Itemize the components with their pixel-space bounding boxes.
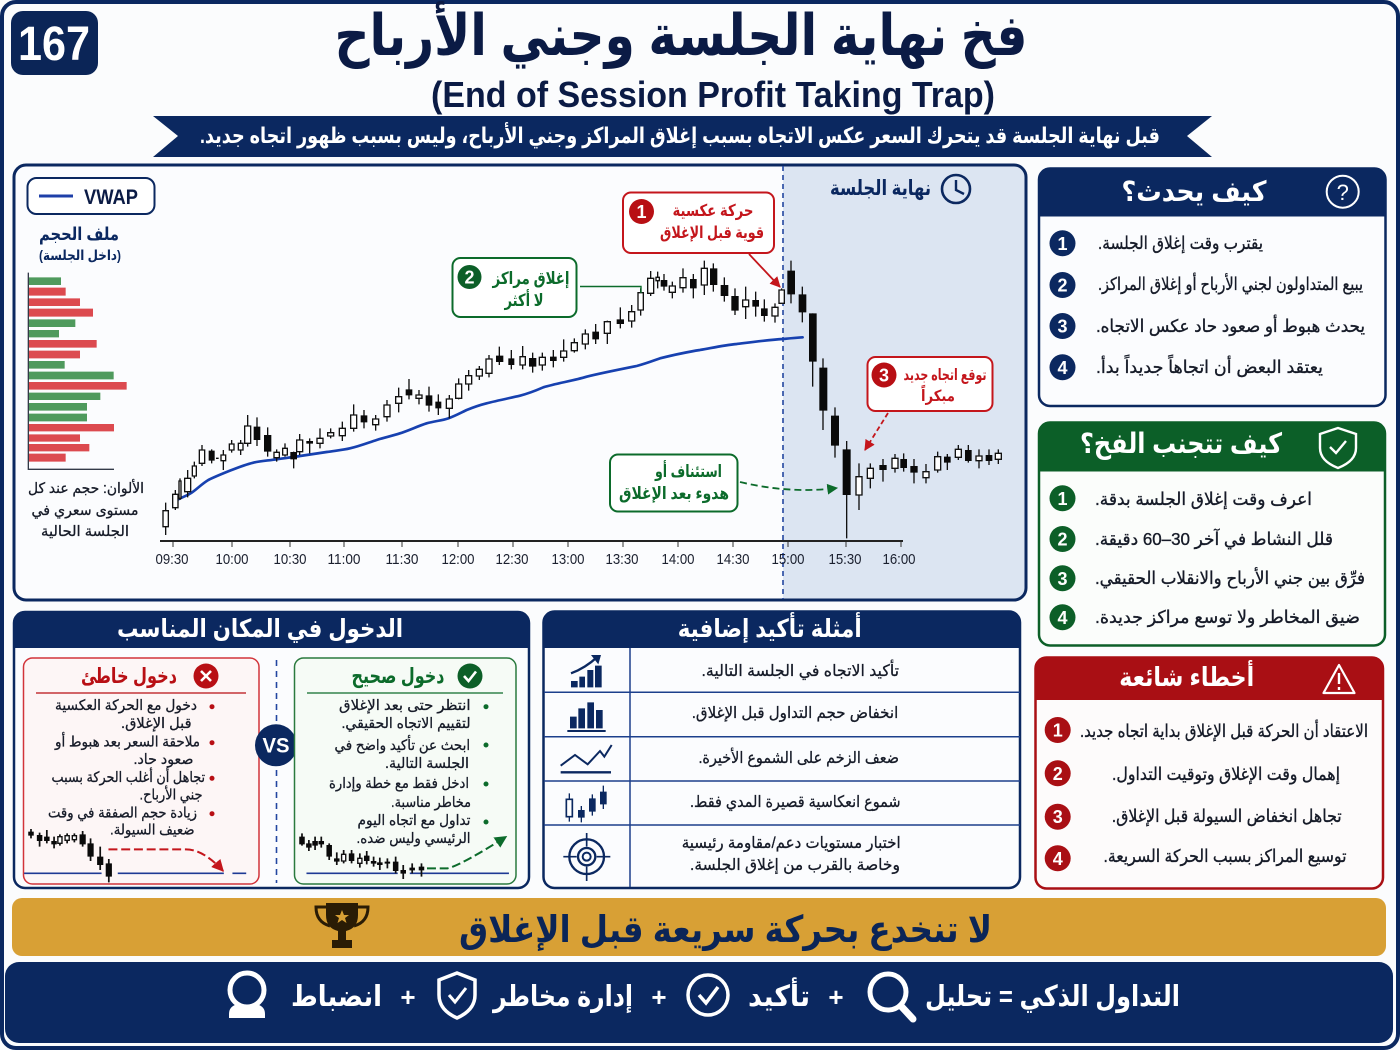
banner: smart trading formula: التداول الذكي = تحليل [925,981,1180,1013]
box: correct entry: ادخل فقط مع خطة وإدارة [329,776,469,792]
list: how it happens steps: 2 [1057,276,1068,296]
box: wrong entry: جني الأرباح. [140,786,202,804]
list: mistakes [1045,717,1368,871]
callout 2: closing positions: إغلاق مراكز [492,269,570,289]
box: correct entry: دخول صحيح [352,665,445,688]
list: avoidance steps: قلل النشاط في آخر 30–60 دقيقة. [1095,528,1333,550]
axis: time axis: 11:30 [386,551,418,568]
callout 2: closing positions [452,258,576,317]
table: confirmation rows text: شموع انعكاسية قصيرة المدي فقط. [690,794,901,812]
divider and VS badge: VS [262,734,290,758]
heading: how does it happen: كيف يحدث؟ [1122,176,1267,207]
banner: gold warning [12,898,1386,956]
box: correct entry: الجلسة التالية. [385,756,469,772]
text: colour note [28,479,144,540]
box: correct entry: الرئيسي وليس ضده. [356,831,470,847]
axis: time axis: 10:30 [274,551,306,568]
callout 4: calm after close [610,454,738,512]
list: avoidance steps: 2 [1057,530,1068,550]
badge: number 167: 167 [18,18,90,71]
ribbon: summary sentence: قبل نهاية الجلسة قد يتحرك السعر عكس الاتجاه بسبب إغلاق المراكز وجني الأرباح، وليس بسبب ظهور اتجاه جديد. [200,121,1160,149]
callout 4: calm after close: هدوء بعد الإغلاق [619,484,729,504]
list: how it happens steps: 4 [1057,358,1068,378]
banner: smart trading formula: إدارة مخاطر [491,981,633,1014]
heading: common mistakes: أخطاء شائعة [1119,660,1254,692]
callout 2: closing positions: 2 [464,268,475,288]
box: wrong entry: قبل الإغلاق. [121,716,192,732]
list: how it happens steps: يحدث هبوط أو صعود حاد عكس الاتجاه. [1096,314,1365,337]
list: mistakes: 4 [1053,849,1063,869]
box: correct entry: انتظر حتى بعد الإغلاق [339,698,471,714]
arrow: callout 1 to reversal [749,254,780,287]
table: confirmation rows text [682,659,901,875]
icon: magnifier [870,974,913,1019]
connector: callout 2 to peak [580,286,641,293]
axis: time axis: 14:30 [716,551,750,568]
text: colour note: الألوان: حجم عند كل [28,479,144,497]
axis: time axis: 13:30 [606,551,638,568]
axis: time axis [156,541,916,568]
list: avoidance steps [1050,485,1365,630]
banner: smart trading formula: + [400,982,416,1012]
axis: time axis: 09:30 [156,551,188,568]
callout 1: strong reversal: حركة عكسية [672,202,754,221]
callout 3: early new trend expectation: مبكراً [921,385,955,405]
list: mistakes: إهمال وقت الإغلاق وتوقيت التداول. [1112,764,1340,785]
list: avoidance steps: فرِّق بين جني الأرباح والانقلاب الحقيقي. [1095,567,1365,589]
list: mistakes: 3 [1053,807,1063,827]
chart: candlesticks afternoon and close [520,261,1001,538]
icons: confirmation rows [561,655,612,881]
axis: time axis: 15:00 [772,551,804,568]
icon: question mark: ? [1337,180,1349,205]
callout 4: calm after close: استئناف أو [654,460,722,482]
banner: smart trading formula: + [651,982,667,1012]
line: VWAP [178,337,803,499]
box: wrong entry: تجاهل أن أغلب الحركة بسبب [52,767,205,786]
arrow: callout 4 to candles [740,482,837,490]
panel: how to avoid the trap [1039,422,1385,646]
divider and VS badge [255,660,297,883]
heading: volume profile: (داخل الجلسة) [39,247,121,263]
box: correct entry [294,658,516,884]
panel: price chart [14,165,1026,600]
box: correct entry: تداول مع اتجاه اليوم [358,813,470,829]
legend: VWAP: VWAP [84,186,138,209]
axis: time axis: 13:00 [552,551,584,568]
heading: how to avoid the trap: كيف تتجنب الفخ؟ [1080,428,1283,460]
panel: additional confirmation examples [544,612,1020,888]
icon: check circle [688,975,728,1015]
icon: person [229,973,265,1018]
list: mistakes: 1 [1053,720,1063,740]
box: wrong entry: دخول خاطئ [81,665,177,688]
list: how it happens steps: 1 [1057,234,1068,254]
callout 1: strong reversal: قوية قبل الإغلاق [660,224,764,243]
box: wrong entry: دخول مع الحركة العكسية [55,698,197,714]
box: wrong entry: ضعيف السيولة. [110,822,195,838]
list: avoidance steps: 1 [1057,489,1068,509]
box: correct entry: لتقييم الاتجاه الحقيقي. [342,716,470,732]
chart: volume profile bars [28,273,127,469]
banner: smart trading formula [5,962,1393,1043]
list: mistakes: تجاهل انخفاض السيولة قبل الإغلاق. [1112,806,1342,826]
text: do not be fooled: لا تنخدع بحركة سريعة قبل الإغلاق [459,909,992,951]
banner: smart trading formula: تأكيد [748,977,810,1013]
title: فخ نهاية الجلسة وجني الأرباح [334,1,1028,69]
list: how it happens steps: 3 [1057,316,1068,336]
text: colour note: مستوى سعري في [32,503,138,519]
callout 3: early new trend expectation: 3 [879,366,889,386]
chart: candlesticks morning session [163,347,514,535]
list: mistakes: توسيع المراكز بسبب الحركة السريعة. [1104,846,1347,867]
callout 2: closing positions: لا أكثر [504,289,544,311]
box: wrong entry [24,658,259,884]
axis: time axis: 10:00 [216,551,248,568]
list: mistakes: 2 [1053,764,1063,784]
callout 1: strong reversal: 1 [636,202,647,222]
box: wrong entry: ملاحقة السعر بعد هبوط أو [54,732,200,750]
list: how it happens steps: يعتقد البعض أن اتجاهاً جديداً بدأ. [1096,354,1323,377]
list: avoidance steps: 4 [1057,608,1068,628]
panel: how does it happen [1039,168,1386,406]
icon: shield [439,973,475,1018]
list: avoidance steps: ضيق المخاطر ولا توسع مراكز جديدة. [1095,607,1360,628]
heading: entering at the right place: الدخول في المكان المناسب [117,615,403,644]
legend: VWAP [28,178,154,214]
list: how it happens steps [1050,230,1365,380]
table: confirmation rows text: انخفاض حجم التداول قبل الإغلاق. [692,705,898,723]
callout 3: early new trend expectation: توقع اتجاه جديد [904,367,986,384]
panel: entering at the right place [14,612,529,888]
box: wrong entry: زيادة حجم الصفقة في وقت [48,806,197,822]
axis: time axis: 14:00 [662,551,694,568]
heading: additional confirmation examples: أمثلة تأكيد إضافية [678,612,862,643]
table: confirmation rows text: ضعف الزخم على الشموع الأخيرة. [698,747,899,768]
panel: common mistakes [1036,658,1383,888]
axis: time axis: 12:00 [442,551,474,568]
list: how it happens steps: يقترب وقت إغلاق الجلسة. [1098,233,1263,254]
box: wrong entry: صعود حاد. [134,752,194,768]
heading: volume profile: ملف الحجم [39,224,119,244]
box: correct entry: مخاطر مناسبة. [391,795,471,811]
axis: time axis: 12:30 [496,551,528,568]
arrow: callout 3 to candles [865,413,888,450]
callout 1: strong reversal [623,192,774,253]
axis: time axis: 11:00 [328,551,360,568]
list: avoidance steps: اعرف وقت إغلاق الجلسة بدقة. [1095,489,1312,510]
icon: trophy [316,903,368,948]
axis: time axis: 15:30 [828,551,862,568]
table: confirmation rows text: تأكيد الاتجاه في الجلسة التالية. [702,659,899,681]
table: confirmation rows text: وخاصة بالقرب من إغلاق الجلسة. [690,857,900,875]
icon: question mark [1327,176,1359,208]
icon: warning triangle [1324,665,1354,693]
banner: smart trading formula: انضباط [291,981,382,1013]
table: confirmation rows text: اختبار مستويات دعم/مقاومة رئيسية [682,835,901,853]
box: correct entry: ابحث عن تأكيد واضح في [335,735,470,754]
list: avoidance steps: 3 [1057,569,1068,589]
subtitle: (End of Session Profit Taking Trap) [431,74,995,115]
icon: shield check [1320,428,1356,468]
axis: time axis: 16:00 [882,551,916,568]
heading: end of session with clock: نهاية الجلسة [830,177,931,200]
text: colour note: الجلسة الحالية [41,524,129,540]
callout 3: early new trend expectation [868,357,992,411]
banner: smart trading formula: + [828,982,844,1012]
heading: volume profile [39,224,121,263]
ribbon: summary sentence [153,116,1212,157]
